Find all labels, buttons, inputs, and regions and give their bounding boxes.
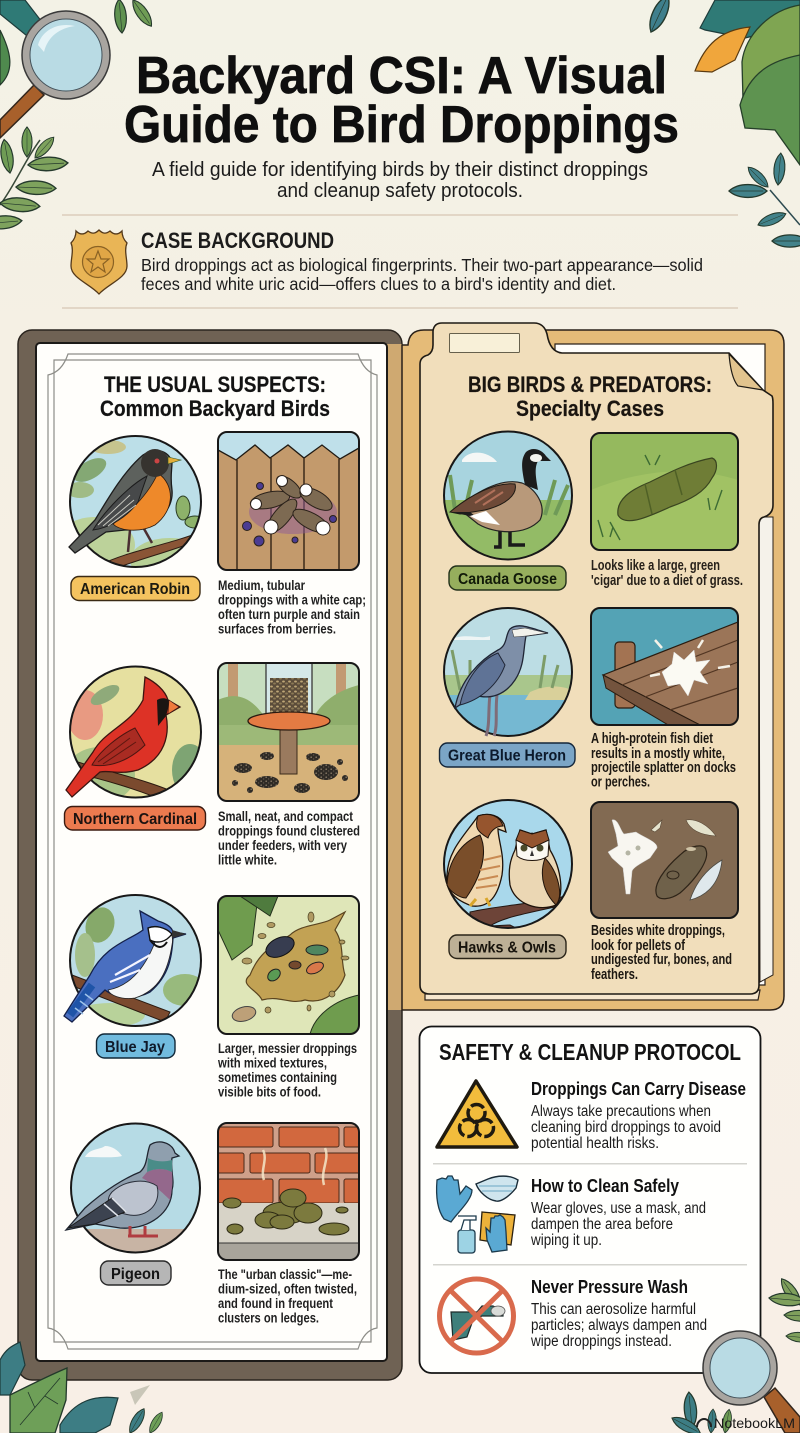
text: hawks description xyxy=(591,923,732,983)
label: blue jay: Blue Jay xyxy=(105,1039,165,1056)
text: robin description: often turn purple and stain xyxy=(218,607,360,622)
text: how to clean safely: How to Clean Safely xyxy=(531,1175,680,1196)
label: american robin: American Robin xyxy=(80,581,190,598)
heading: safety: SAFETY & CLEANUP PROTOCOL xyxy=(439,1039,741,1065)
text: robin description xyxy=(218,578,366,636)
heading: usual suspects xyxy=(100,372,330,421)
text: goose description: 'cigar' due to a diet of grass. xyxy=(591,573,743,589)
image: pigeon droppings on ledge xyxy=(214,1123,365,1260)
icon: magnifying glass top left xyxy=(0,11,110,138)
text: robin description: surfaces from berries. xyxy=(218,622,336,636)
case background: Bird droppings act as biological fingerprints. Their two-part appearance—solid xyxy=(141,255,703,275)
label: pigeon: Pigeon xyxy=(111,1266,160,1283)
case background xyxy=(141,228,703,294)
text: pigeon description: dium-sized, often twisted, xyxy=(218,1282,357,1296)
title: Backyard CSI: A Visual xyxy=(136,47,667,105)
image: robin droppings on fence xyxy=(218,432,359,570)
icon: blue jay xyxy=(64,894,207,1028)
text: pigeon description: and found in frequent xyxy=(218,1296,333,1311)
text: how to clean safely: Wear gloves, use a mask, and xyxy=(531,1200,706,1217)
subtitle: A field guide for identifying birds by their distinct droppings xyxy=(152,159,648,181)
text: hawks description: Besides white droppings, xyxy=(591,923,725,939)
heading: big birds: BIG BIRDS & PREDATORS: xyxy=(468,372,712,397)
label: pigeon xyxy=(100,1261,171,1285)
text: heron description: projectile splatter on docks xyxy=(591,760,736,776)
text: never pressure wash: wipe droppings instead. xyxy=(530,1333,672,1350)
icon: northern cardinal xyxy=(65,666,208,804)
icon: detective badge xyxy=(71,230,127,294)
heading: usual suspects: Common Backyard Birds xyxy=(100,396,330,421)
text: heron description: A high-protein fish diet xyxy=(591,731,713,747)
icon: magnifying glass bottom right xyxy=(703,1331,800,1433)
text: blue jay description xyxy=(217,1041,357,1100)
decorative foliage: top left xyxy=(0,0,156,230)
text: blue jay description: Larger, messier droppings xyxy=(218,1041,357,1056)
subtitle xyxy=(152,159,648,202)
text: cardinal description: under feeders, with very xyxy=(218,838,347,853)
image: seed feeder droppings xyxy=(218,663,359,801)
label: hawks and owls: Hawks & Owls xyxy=(458,940,556,956)
label: hawks and owls xyxy=(449,935,566,958)
icon: american robin xyxy=(68,435,202,568)
text: cardinal description xyxy=(218,809,360,868)
text: blue jay description: visible bits of food. xyxy=(218,1084,321,1100)
text: never pressure wash xyxy=(530,1276,707,1350)
watermark: NotebookLM: NotebookLM xyxy=(714,1415,795,1431)
text: goose description xyxy=(591,558,743,589)
panel: safety and cleanup protocol xyxy=(420,1026,760,1373)
text: blue jay description: sometimes containing xyxy=(218,1070,337,1085)
text: goose description: Looks like a large, green xyxy=(591,558,720,574)
text: heron description: results in a mostly white, xyxy=(591,746,725,762)
text: droppings can carry disease: Always take precautions when xyxy=(531,1103,711,1120)
text: cardinal description: Small, neat, and compact xyxy=(218,809,353,824)
text: droppings can carry disease: potential health risks. xyxy=(531,1135,659,1152)
label: northern cardinal xyxy=(64,806,206,830)
text: heron description xyxy=(591,731,736,790)
text: pigeon description xyxy=(218,1267,357,1326)
label: great blue heron: Great Blue Heron xyxy=(448,748,566,764)
text: cardinal description: little white. xyxy=(218,852,277,868)
ornate frame xyxy=(48,354,377,1349)
text: how to clean safely xyxy=(530,1175,706,1249)
image: goose dropping on grass xyxy=(591,433,738,550)
text: never pressure wash: This can aerosolize harmful xyxy=(531,1301,696,1318)
heading: usual suspects: THE USUAL SUSPECTS: xyxy=(104,372,326,397)
heading: big birds: Specialty Cases xyxy=(516,396,664,421)
text: droppings can carry disease xyxy=(531,1078,746,1152)
image: heron splatter on dock xyxy=(591,608,738,732)
text: hawks description: undigested fur, bones, and xyxy=(591,952,732,968)
icon: pigeon xyxy=(66,1123,203,1259)
label: blue jay xyxy=(96,1034,175,1058)
text: how to clean safely: dampen the area before xyxy=(531,1216,673,1233)
label: canada goose xyxy=(449,566,566,590)
text: blue jay description: with mixed textures, xyxy=(217,1056,327,1070)
decorative foliage: top right xyxy=(645,0,800,247)
text: droppings can carry disease: cleaning bird droppings to avoid xyxy=(531,1119,721,1136)
decorative foliage: bottom left xyxy=(0,1342,166,1433)
text: cardinal description: droppings found clustered xyxy=(218,824,360,838)
text: heron description: or perches. xyxy=(591,774,650,790)
subtitle: and cleanup safety protocols. xyxy=(277,180,523,202)
image: owl pellets on dirt xyxy=(591,802,738,918)
text: hawks description: feathers. xyxy=(591,967,638,983)
text: robin description: Medium, tubular xyxy=(218,578,306,593)
case background: feces and white uric acid—offers clues to a bird's identity and diet. xyxy=(141,274,616,294)
panel: right case folder xyxy=(402,323,784,1010)
case background: CASE BACKGROUND xyxy=(141,228,334,253)
text: pigeon description: clusters on ledges. xyxy=(218,1310,319,1326)
icon: great blue heron xyxy=(444,608,572,740)
text: robin description: droppings with a white cap; xyxy=(218,592,366,608)
text: pigeon description: The "urban classic"—me- xyxy=(218,1267,352,1282)
text: hawks description: look for pellets of xyxy=(591,938,685,954)
image: messy droppings xyxy=(218,896,359,1034)
icon: no pressure washer xyxy=(440,1279,514,1353)
text: droppings can carry disease: Droppings Can Carry Disease xyxy=(531,1078,746,1099)
heading: big birds xyxy=(468,372,712,421)
text: never pressure wash: Never Pressure Wash xyxy=(531,1276,688,1297)
title: Guide to Bird Droppings xyxy=(124,96,679,154)
panel: left dossier folder xyxy=(18,330,402,1380)
icon: biohazard warning sign xyxy=(437,1081,517,1147)
icon: canada goose xyxy=(444,431,572,560)
text: never pressure wash: particles; always dampen and xyxy=(531,1317,707,1334)
label: canada goose: Canada Goose xyxy=(458,571,557,588)
icon: hawk and owl xyxy=(444,800,572,930)
icon: gloves, mask, spray xyxy=(437,1176,518,1253)
label: great blue heron xyxy=(440,743,575,767)
decorative foliage: bottom right xyxy=(669,1276,800,1433)
label: american robin xyxy=(71,576,200,600)
label: northern cardinal: Northern Cardinal xyxy=(73,811,197,828)
text: how to clean safely: wiping it up. xyxy=(530,1232,602,1249)
title xyxy=(124,47,679,154)
